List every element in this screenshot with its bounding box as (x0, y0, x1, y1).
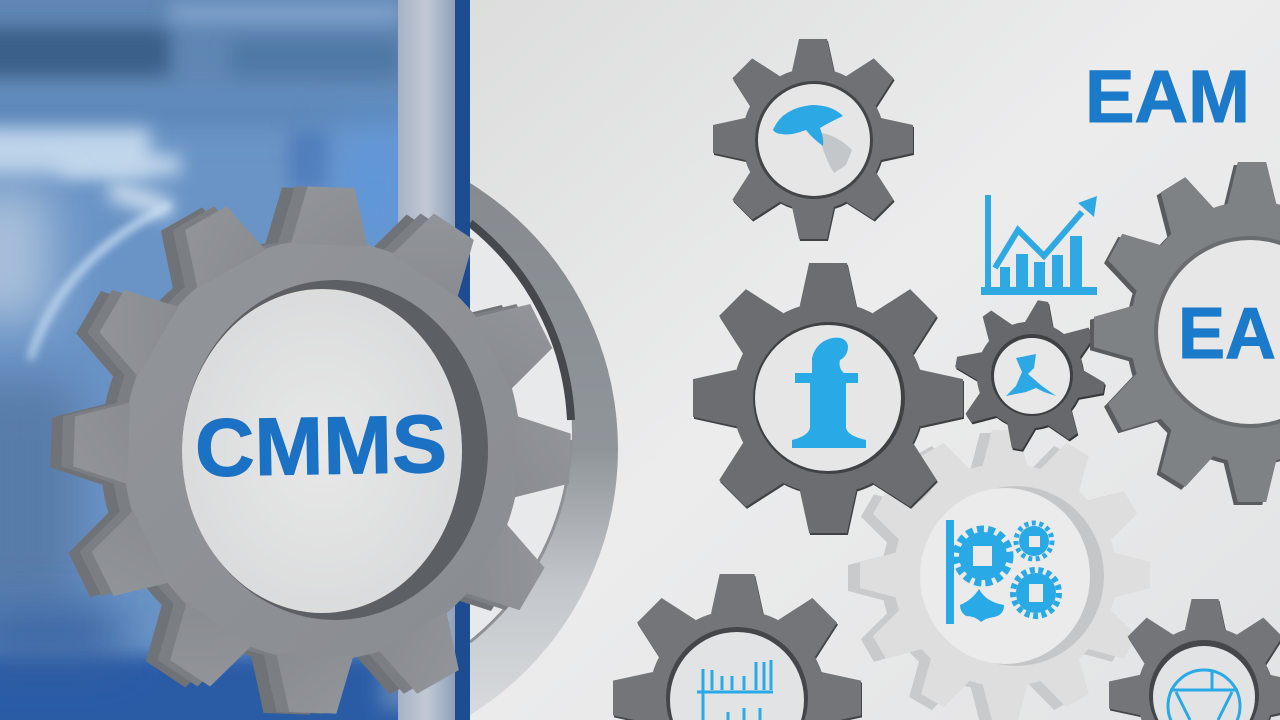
gear: bottom right with circle icon (1109, 599, 1280, 720)
chart icon: rising graph with arrow (981, 195, 1097, 295)
vertical steel strip (398, 0, 455, 720)
right light panel (470, 0, 1280, 720)
circular steel housing ring (470, 183, 618, 715)
gear: EAM (1090, 162, 1280, 505)
dark blue divider (455, 0, 470, 720)
gear: pale background gear (848, 430, 1150, 720)
icon: blue circle device (1168, 670, 1240, 720)
gear: centre with f-shaped icon (693, 263, 964, 535)
icon: blue data bars (697, 660, 773, 720)
gear: top with droplet icon (713, 39, 914, 241)
gear: bottom left with data icon (613, 574, 862, 720)
gear: small connector (943, 288, 1118, 464)
label: CMMS: CMMS (194, 399, 448, 494)
blurred blue machinery background (0, 0, 398, 720)
gear: CMMS (42, 179, 579, 720)
heading: EAM: EAM (1085, 55, 1250, 138)
icon: abstract blue shape (773, 105, 852, 173)
icon: f-shaped blue glyph (792, 338, 866, 448)
icon: small blue mark (1006, 354, 1056, 396)
label: EA: EA (1178, 294, 1276, 374)
icon: gears cluster (946, 520, 1059, 624)
